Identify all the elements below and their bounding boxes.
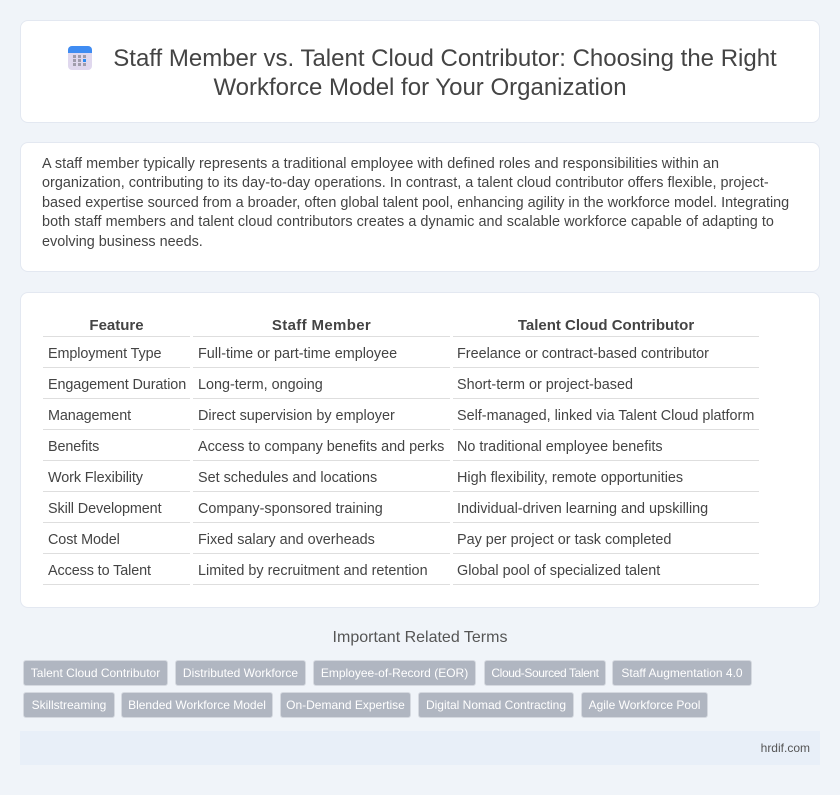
panel: title card <box>20 20 820 123</box>
text block: introduction: both staff members and talent cloud contributors creates a dynamic and scalable workforce capable of adapting to <box>42 214 774 230</box>
comparison table: Individual-driven learning and upskilling <box>457 501 708 517</box>
column headers <box>89 317 694 334</box>
comparison table: Set schedules and locations <box>198 470 377 486</box>
text block: introduction: organization, contributing to its day-to-day operations. In contrast, a talent cloud contributor offers flexible, project- <box>42 175 769 191</box>
column headers: Feature <box>89 317 144 334</box>
title <box>113 45 777 101</box>
footer <box>20 731 820 765</box>
comparison table: Engagement Duration <box>48 377 186 393</box>
panel: comparison table <box>20 292 820 608</box>
comparison table: Fixed salary and overheads <box>198 532 375 548</box>
tags: related terms: Agile Workforce Pool <box>589 698 700 712</box>
comparison table: Cost Model <box>48 532 120 548</box>
heading: related terms: Important Related Terms <box>333 629 507 646</box>
tags: related terms <box>23 660 752 718</box>
tags: related terms: Skillstreaming <box>32 698 106 712</box>
tags: related terms: Blended Workforce Model <box>128 698 266 712</box>
column headers: Staff Member <box>272 317 371 334</box>
comparison table: Employment Type <box>48 346 161 362</box>
tags: related terms: Cloud-Sourced Talent <box>491 666 599 680</box>
comparison table: Full-time or part-time employee <box>198 346 397 362</box>
tags: related terms: Talent Cloud Contributor <box>31 666 160 680</box>
comparison table: Work Flexibility <box>48 470 143 486</box>
comparison table: Self-managed, linked via Talent Cloud platform <box>457 408 754 424</box>
comparison table: Short-term or project-based <box>457 377 633 393</box>
tags: related terms: Employee-of-Record (EOR) <box>321 666 468 680</box>
title: Staff Member vs. Talent Cloud Contributor: Choosing the Right <box>113 45 777 72</box>
text block: introduction: A staff member typically represents a traditional employee with defined roles and responsibilities within an <box>42 156 719 172</box>
column headers: Talent Cloud Contributor <box>518 317 694 334</box>
comparison table: Company-sponsored training <box>198 501 383 517</box>
tags: related terms: Distributed Workforce <box>183 666 298 680</box>
comparison table: Pay per project or task completed <box>457 532 671 548</box>
comparison table: Direct supervision by employer <box>198 408 395 424</box>
comparison table: No traditional employee benefits <box>457 439 663 455</box>
text block: introduction <box>42 156 789 250</box>
comparison table: Access to Talent <box>48 563 151 579</box>
text block: introduction: evolving business needs. <box>42 234 203 250</box>
text block: introduction: based expertise sourced from a broader, often global talent pool, enhancing agility in the workforce model. Integrating <box>42 195 789 211</box>
footer source: hrdif.com <box>761 741 810 755</box>
comparison table: Long-term, ongoing <box>198 377 323 393</box>
comparison table: Limited by recruitment and retention <box>198 563 428 579</box>
comparison table <box>43 317 759 585</box>
comparison table: Management <box>48 408 131 424</box>
comparison table: Freelance or contract-based contributor <box>457 346 709 362</box>
icon: calendar app <box>68 46 92 70</box>
title: Workforce Model for Your Organization <box>213 74 627 101</box>
comparison table: Benefits <box>48 439 99 455</box>
tags: related terms: Digital Nomad Contracting <box>426 698 566 712</box>
tags: related terms: On-Demand Expertise <box>286 698 405 712</box>
comparison table: Global pool of specialized talent <box>457 563 660 579</box>
comparison table: Skill Development <box>48 501 161 517</box>
panel: introduction <box>20 142 820 272</box>
comparison table: High flexibility, remote opportunities <box>457 470 683 486</box>
comparison table: Access to company benefits and perks <box>198 439 444 455</box>
tags: related terms: Staff Augmentation 4.0 <box>621 666 743 680</box>
